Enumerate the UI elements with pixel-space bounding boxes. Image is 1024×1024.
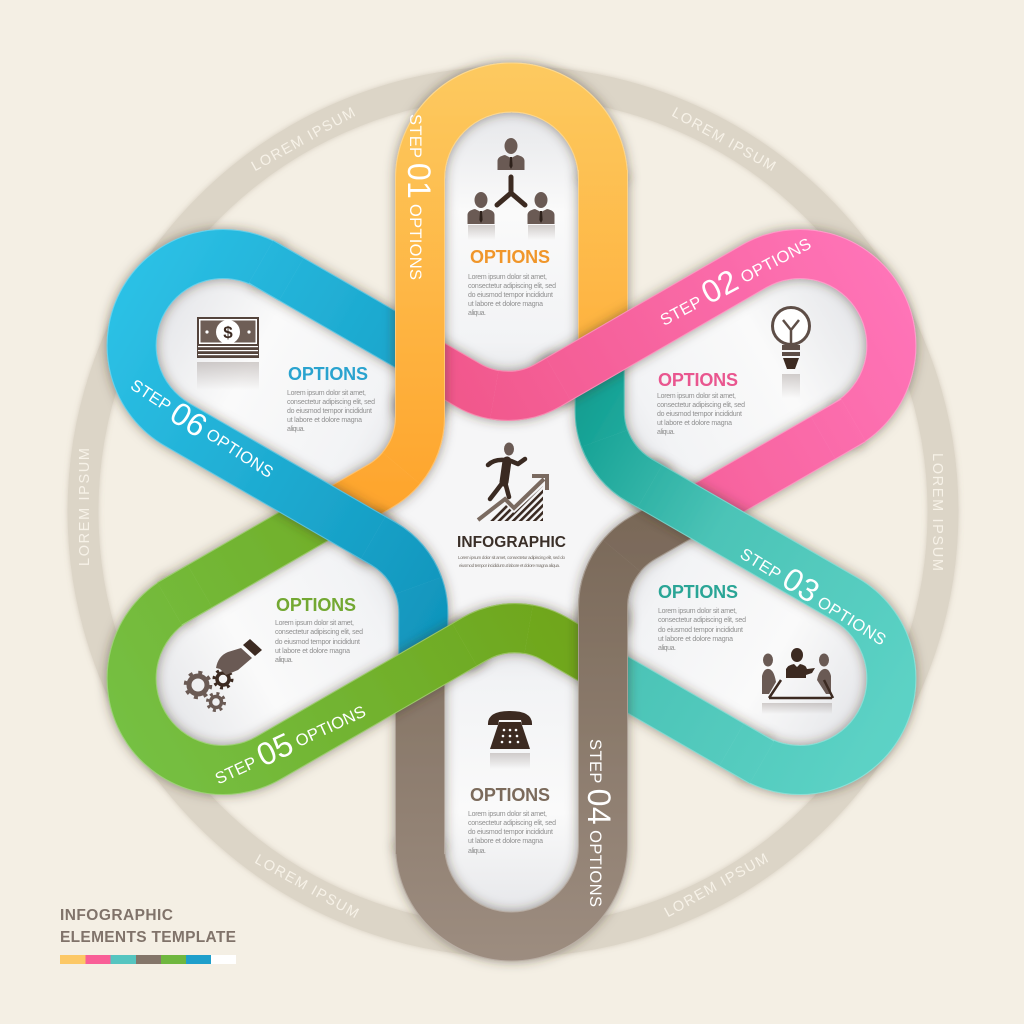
body text: do eiusmod tempor incididunt xyxy=(468,292,553,299)
icon: money stack xyxy=(197,317,259,390)
step 02 label: STEP xyxy=(657,293,705,330)
body text: aliqua. xyxy=(657,429,675,436)
heading: OPTIONS xyxy=(470,247,550,267)
body text: do eiusmod tempor incididunt xyxy=(657,411,742,418)
step 01 label: 01 xyxy=(401,163,437,199)
body text: aliqua. xyxy=(287,426,305,433)
panel: step 03 content xyxy=(658,582,833,714)
step 05 label: OPTIONS xyxy=(289,703,369,753)
icon: meeting xyxy=(762,648,833,714)
body text: ut labore et dolore magna xyxy=(468,838,543,845)
ribbon seam patches xyxy=(160,170,863,854)
ring labels: LOREM IPSUM xyxy=(77,448,93,566)
body text xyxy=(275,620,363,664)
step 03 label: 03 xyxy=(776,560,826,610)
panel: step 02 content xyxy=(657,308,810,436)
ribbons: arcs and long legs xyxy=(98,87,925,936)
panel: step 05 content xyxy=(186,595,363,710)
icon: hand with gears xyxy=(186,639,262,710)
ring labels xyxy=(77,105,945,922)
body text: consectetur adipiscing elit, sed xyxy=(658,617,746,624)
body text xyxy=(658,608,746,652)
body text: do eiusmod tempor incididunt xyxy=(275,639,360,646)
ring labels: LOREM IPSUM xyxy=(252,852,361,922)
body text: consectetur adipiscing elit, sed xyxy=(657,402,745,409)
body text: Lorem ipsum dolor sit amet, xyxy=(275,620,354,627)
panel: step 06 content xyxy=(197,317,375,433)
step 06 label: 06 xyxy=(164,395,214,444)
center body text: Lorem ipsum dolor sit amet, consectetur adipiscing elit, sed do xyxy=(458,555,565,560)
step 02 label: 02 xyxy=(695,262,744,311)
center body text xyxy=(458,555,565,568)
step 05 label: STEP xyxy=(212,754,259,788)
body text xyxy=(468,811,556,855)
body text: Lorem ipsum dolor sit amet, xyxy=(468,274,547,281)
step 06 label: OPTIONS xyxy=(199,423,276,482)
step 04 label: 04 xyxy=(581,789,617,825)
icon: money stack: $ xyxy=(223,323,233,342)
body text: consectetur adipiscing elit, sed xyxy=(468,820,556,827)
body text: aliqua. xyxy=(658,645,676,652)
step 05 label: 05 xyxy=(251,726,299,773)
body text: aliqua. xyxy=(468,848,486,855)
step 03 label: STEP xyxy=(737,545,784,584)
outer ring xyxy=(83,82,943,942)
panel: step 04 content xyxy=(468,711,556,855)
step 04 label: OPTIONS xyxy=(586,825,604,907)
body text: consectetur adipiscing elit, sed xyxy=(275,629,363,636)
icon: people network xyxy=(468,138,555,240)
heading: OPTIONS xyxy=(658,370,738,390)
step 06 label: STEP xyxy=(127,376,174,415)
panel: step 01 content xyxy=(468,138,556,317)
body text: Lorem ipsum dolor sit amet, xyxy=(658,608,737,615)
body text: ut labore et dolore magna xyxy=(657,420,732,427)
ribbons: lower legs and tails xyxy=(130,175,893,849)
ring labels: LOREM IPSUM xyxy=(669,105,778,175)
footer colour bar xyxy=(60,955,236,964)
body text: aliqua. xyxy=(275,657,293,664)
ring labels: LOREM IPSUM xyxy=(929,453,945,571)
body text xyxy=(287,390,375,433)
body text: consectetur adipiscing elit, sed xyxy=(287,399,375,406)
body text xyxy=(468,274,556,317)
icon: telephone xyxy=(488,711,532,769)
panel: center xyxy=(457,442,566,568)
white inner panels xyxy=(98,87,925,936)
body text: ut labore et dolore magna xyxy=(287,417,362,424)
body text: do eiusmod tempor incididunt xyxy=(658,627,743,634)
ring labels: LOREM IPSUM xyxy=(662,851,771,921)
icon: runner on rising arrow xyxy=(478,442,547,521)
body text: ut labore et dolore magna xyxy=(275,648,350,655)
step 04 label: STEP xyxy=(586,739,604,783)
ring labels: LOREM IPSUM xyxy=(249,105,358,175)
heading: OPTIONS xyxy=(658,582,738,602)
icon: light bulb xyxy=(772,308,810,398)
footer title: INFOGRAPHIC xyxy=(60,907,173,924)
center heading: INFOGRAPHIC xyxy=(457,534,566,551)
heading: OPTIONS xyxy=(276,595,356,615)
heading: OPTIONS xyxy=(288,364,368,384)
body text: do eiusmod tempor incididunt xyxy=(287,408,372,415)
body text: ut labore et dolore magna xyxy=(658,636,733,643)
body text: ut labore et dolore magna xyxy=(468,301,543,308)
center body text: eiusmod tempor incididunt ut labore et dolore magna aliqua. xyxy=(459,563,560,568)
step 01 label: OPTIONS xyxy=(406,199,424,280)
body text: Lorem ipsum dolor sit amet, xyxy=(657,393,736,400)
step 02 label: OPTIONS xyxy=(733,235,814,289)
body text: Lorem ipsum dolor sit amet, xyxy=(287,390,366,397)
step 03 label: OPTIONS xyxy=(810,591,889,649)
heading: OPTIONS xyxy=(470,785,550,805)
body text: aliqua. xyxy=(468,310,486,317)
body text xyxy=(657,393,745,436)
footer title: ELEMENTS TEMPLATE xyxy=(60,929,236,946)
body text: consectetur adipiscing elit, sed xyxy=(468,283,556,290)
step 01 label: STEP xyxy=(406,114,424,158)
footer title xyxy=(60,907,236,946)
body text: Lorem ipsum dolor sit amet, xyxy=(468,811,547,818)
body text: do eiusmod tempor incididunt xyxy=(468,829,553,836)
